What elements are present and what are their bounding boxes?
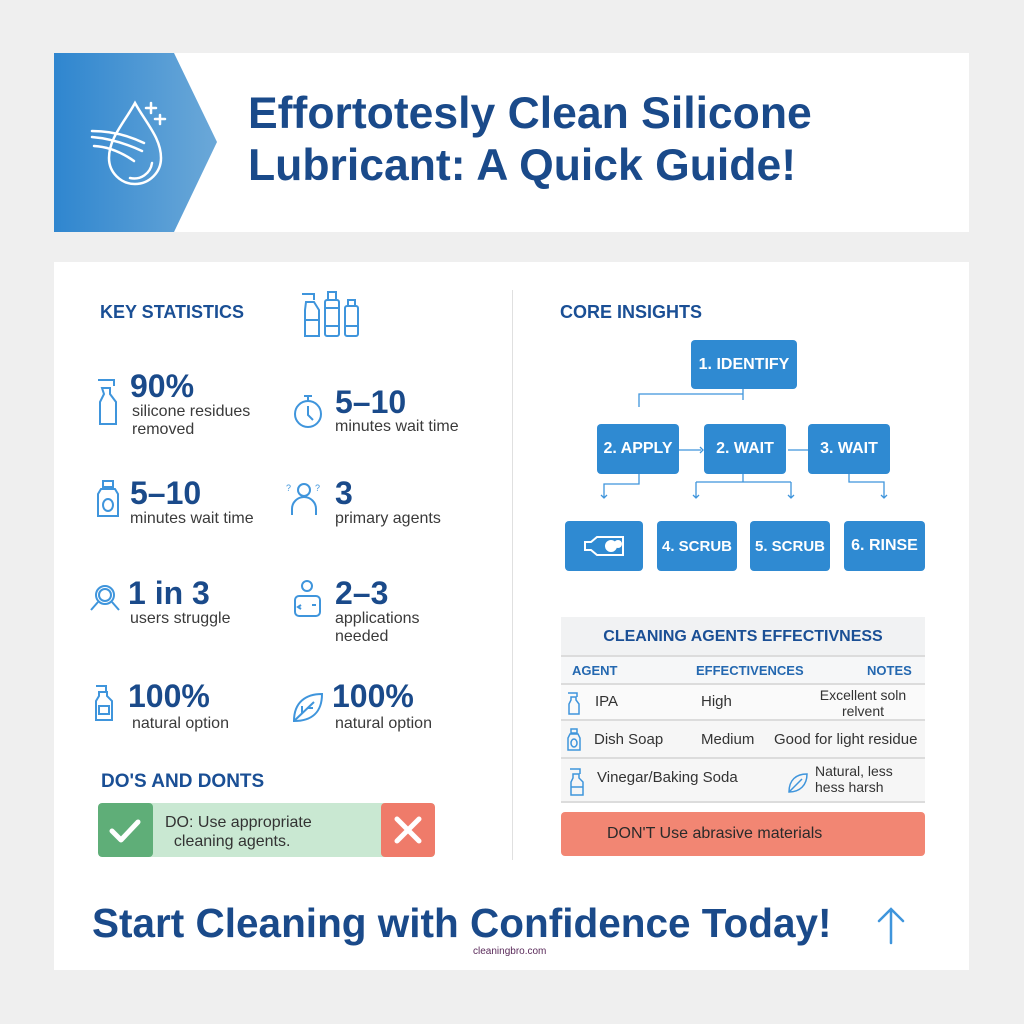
heading: key statistics: KEY STATISTICS	[100, 302, 244, 322]
row: dish soap: Good for light residue	[774, 731, 917, 748]
stat: 90%	[98, 368, 250, 438]
stat: 100% natural	[95, 678, 229, 732]
stat: 3 primary agents: ?	[315, 483, 320, 493]
stat: 100% natural leaf: 100%	[332, 678, 414, 714]
table: cleaning agents effectiveness	[561, 617, 925, 803]
stat: 5-10 minutes 2	[97, 475, 254, 527]
heading: dos and donts: DO'S AND DONTS	[101, 771, 264, 792]
stat: 2-3 applications: 2–3	[335, 575, 388, 611]
panel: core insights: 4. SCRUB	[662, 538, 732, 554]
stat: 100% natural leaf	[293, 678, 432, 732]
main card	[54, 262, 969, 970]
panel: core insights: 2. WAIT	[716, 440, 774, 457]
panel: key statistics	[90, 291, 459, 857]
stat: 5-10 minutes 2: 5–10	[130, 475, 201, 511]
row: IPA	[561, 685, 925, 721]
table: cleaning agents effectiveness: NOTES	[867, 663, 912, 678]
panel: core insights: 2. APPLY	[603, 440, 673, 457]
title	[248, 89, 812, 190]
panel: core insights: 6. RINSE	[851, 537, 918, 554]
icon: check	[98, 803, 153, 857]
row: dish soap: Dish Soap	[594, 731, 663, 748]
stat: 1 in 3: users struggle	[130, 610, 230, 627]
footer url: cleaningbro.com	[473, 946, 546, 957]
step boxes: 1. IDENTIFY	[699, 356, 789, 372]
stat: 3 primary agents: primary agents	[335, 510, 441, 527]
header icon banner	[54, 53, 217, 232]
stat: 100% natural: 100%	[128, 678, 210, 714]
do bar	[98, 803, 435, 857]
row: IPA: IPA	[595, 693, 618, 710]
icon box: bottle	[565, 521, 643, 571]
do bar: cleaning agents.	[174, 833, 290, 850]
icon: up arrow	[878, 907, 904, 944]
stat: 3 primary agents: 3	[335, 475, 353, 511]
table: cleaning agents effectiveness: AGENT	[572, 663, 618, 678]
stat: 2-3 applications	[294, 575, 420, 645]
heading: core insights: CORE INSIGHTS	[560, 302, 702, 322]
panel: core insights	[560, 302, 925, 571]
step boxes	[691, 340, 797, 389]
title: Effortotesly Clean Silicone	[248, 89, 812, 138]
panel: core insights: 3. WAIT	[820, 440, 878, 457]
row: IPA: High	[701, 693, 732, 710]
row: vinegar: Vinegar/Baking Soda	[597, 769, 738, 786]
icon: bottles	[302, 291, 359, 337]
stat: 90%: removed	[132, 421, 194, 438]
stat: 5-10 minutes 2: minutes wait time	[130, 510, 254, 527]
row: vinegar	[561, 759, 925, 803]
panel: core insights: 5. SCRUB	[755, 538, 825, 554]
stat: 5-10 minutes	[294, 384, 459, 435]
dont bar	[561, 812, 925, 856]
stat: 90%: silicone residues	[132, 403, 250, 420]
footer call to action: Start Cleaning with Confidence Today!	[92, 900, 832, 946]
stat: 2-3 applications: needed	[335, 628, 388, 645]
stat: 2-3 applications: applications	[335, 610, 420, 627]
stat: 100% natural: natural option	[132, 715, 229, 732]
row: vinegar: Natural, less	[815, 763, 893, 779]
stat: 100% natural leaf: natural option	[335, 715, 432, 732]
flowchart	[600, 389, 888, 499]
stat: 90%: 90%	[130, 368, 194, 404]
row: IPA: relvent	[842, 703, 884, 719]
row: dish soap: Medium	[701, 731, 754, 748]
stat: 1 in 3	[90, 575, 230, 627]
stat: 3 primary agents: ?	[286, 483, 291, 493]
stat: 5-10 minutes: 5–10	[335, 384, 406, 420]
icon: x	[381, 803, 435, 857]
dont bar: DON'T Use abrasive materials	[607, 825, 822, 842]
row: dish soap	[561, 721, 925, 759]
stat: 3 primary agents	[286, 475, 441, 527]
title: Lubricant: A Quick Guide!	[248, 141, 796, 190]
stat: 5-10 minutes: minutes wait time	[335, 418, 459, 435]
table: cleaning agents effectiveness: CLEANING AGENTS EFFECTIVNESS	[603, 628, 883, 645]
row: vinegar: hess harsh	[815, 779, 883, 795]
header card	[54, 53, 969, 232]
stat: 1 in 3: 1 in 3	[128, 575, 210, 611]
do bar: DO: Use appropriate	[165, 814, 312, 831]
table: cleaning agents effectiveness: EFFECTIVENCES	[696, 663, 804, 678]
row: IPA: Excellent soln	[820, 687, 906, 703]
